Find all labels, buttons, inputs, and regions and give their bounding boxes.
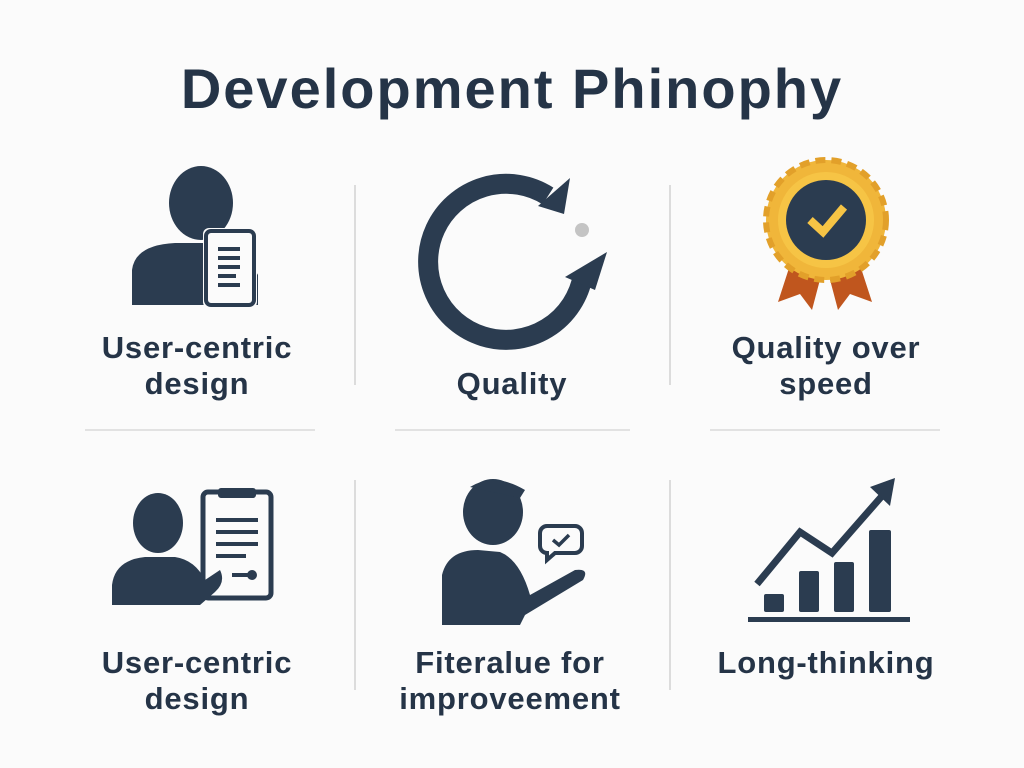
title: Development Phinophy [181,57,843,120]
label: user-centric design 2 [102,645,292,716]
icon: award badge [766,160,886,310]
icon: user with tablet [132,166,258,308]
label: feedback for improvement [399,645,621,716]
icon: circular arrow [428,178,607,340]
label: long-thinking: Long-thinking [717,645,934,680]
label: user-centric design 1 [102,330,292,401]
label: quality: Quality [457,366,567,401]
icon: user presenting clipboard [112,488,271,605]
icon: person with feedback bubble [442,479,585,625]
label: user-centric design 1: User-centric [102,330,292,365]
label: user-centric design 1: design [145,366,249,401]
label: feedback for improvement: Fiteralue for [415,645,605,680]
icon: growth bar chart [748,478,910,622]
label: quality over speed: Quality over [732,330,920,365]
label: quality over speed: speed [779,366,873,401]
label: quality over speed [732,330,920,401]
label: user-centric design 2: User-centric [102,645,292,680]
label: feedback for improvement: improveement [399,681,621,716]
label: user-centric design 2: design [145,681,249,716]
